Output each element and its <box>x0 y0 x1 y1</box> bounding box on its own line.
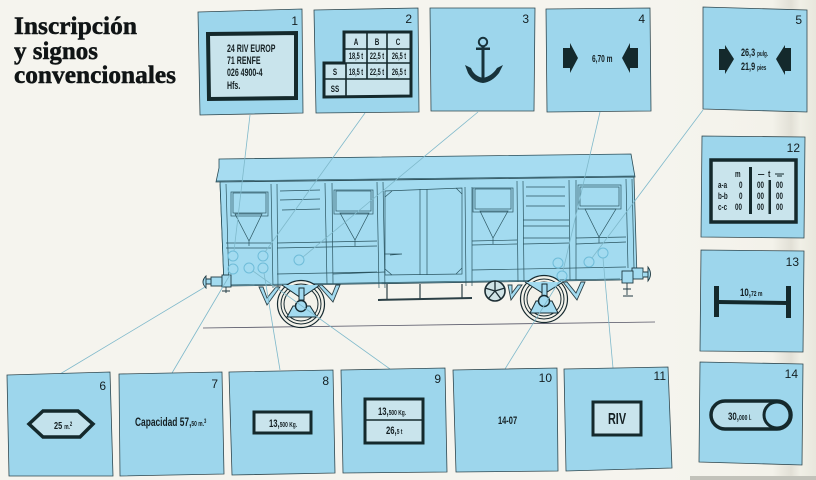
panel 12: load table: 0 <box>739 191 742 201</box>
left buffer <box>203 275 231 293</box>
wagon body <box>220 177 637 286</box>
panel 11: RIV sign: RIV <box>608 410 627 428</box>
panel 12: load table: 0 <box>739 180 742 190</box>
panel 9: weight and tonnage sign: 26,5 t <box>386 425 402 437</box>
panel 2: load table <box>314 8 419 113</box>
panel 4: axle arrows 6,70 m <box>546 8 651 112</box>
panel 12: load table: 00 <box>757 202 764 212</box>
panel 7: capacity <box>119 372 224 476</box>
panel 3: anchor sign: 3 <box>522 12 529 26</box>
panel 12: load table: t <box>768 169 771 179</box>
panel 6: hexagon area sign: 2 <box>70 421 72 428</box>
panel 12: load table: — <box>758 169 764 179</box>
right buffer <box>622 267 650 296</box>
marking location circles <box>228 248 608 281</box>
panel 5: gauge arrows: 21,9 pies <box>741 61 767 72</box>
title: y signos <box>14 38 98 65</box>
panel 12: load table: 00 <box>735 202 742 212</box>
panel 13: wheelbase sign: 13 <box>786 255 799 269</box>
panel 11: RIV sign <box>564 367 672 471</box>
panel 2: load table: B <box>375 37 380 47</box>
brake wheel <box>485 281 505 301</box>
panel 2: load table: C <box>396 37 401 47</box>
wagon roof <box>216 154 635 182</box>
panel 7: capacity: Capacidad 57,50 m. <box>135 417 204 429</box>
panel 14: tank capacity sign: 30,000 l. <box>728 411 752 423</box>
panel 12: load table: 00 <box>776 202 783 212</box>
panel 5: gauge arrows: 26,3 pulg. <box>741 47 768 58</box>
panel 10: revision date: 10 <box>539 371 552 385</box>
panel 2: load table: S <box>333 67 337 77</box>
panel 8: weight sign: 13,500 Kg. <box>269 418 297 430</box>
panel 8: weight sign <box>229 370 335 475</box>
panel 1: wagon inscription: 026 4900-4 <box>227 66 263 78</box>
panel 14: tank capacity sign <box>699 362 803 465</box>
panel 12: load table <box>701 136 805 238</box>
loading hatches with triangles <box>231 185 621 246</box>
right wheel and axle box <box>520 276 568 322</box>
panel 9: weight and tonnage sign: 9 <box>434 372 441 386</box>
panel 10: revision date <box>453 368 558 472</box>
panel 12: load table: a-a <box>718 180 728 190</box>
panel 4: axle arrows 6,70 m: 4 <box>638 12 645 26</box>
panel 14: tank capacity sign: 14 <box>785 367 798 381</box>
panel 12: load table: 00 <box>757 180 764 190</box>
footboard <box>378 284 472 300</box>
panel 9: weight and tonnage sign <box>341 368 447 473</box>
body posts and rails <box>216 176 635 288</box>
panel 7: capacity: 7 <box>211 377 218 391</box>
title <box>14 13 176 89</box>
title: convencionales <box>14 62 176 89</box>
panel 6: hexagon area sign: 6 <box>99 379 106 393</box>
panel 12: load table: 12 <box>787 141 800 155</box>
panel 1: wagon inscription: 1 <box>291 14 298 28</box>
ground line <box>203 322 655 328</box>
panel 7: capacity: 3 <box>204 418 206 425</box>
panel 12: load table: 00 <box>757 191 764 201</box>
panel 5: gauge arrows <box>703 7 807 112</box>
panel 2: load table: SS <box>331 84 339 94</box>
panel 10: revision date: 14-07 <box>498 413 517 426</box>
panel 4: axle arrows 6,70 m: 6,70 m <box>592 53 613 64</box>
panel 12: load table: c-c <box>718 202 728 212</box>
panel 2: load table: 22,5 t <box>370 51 384 61</box>
leader lines <box>60 110 703 374</box>
panel 12: load table: 00 <box>776 191 783 201</box>
panel 12: load table: 00 <box>776 180 783 190</box>
suspension springs <box>259 282 585 305</box>
panel 2: load table: 2 <box>405 12 412 26</box>
panel 2: load table: 18,5 t <box>349 51 363 61</box>
panel 2: load table: A <box>354 37 359 47</box>
panel 13: wheelbase sign <box>700 250 804 352</box>
panel 2: load table: 26,5 t <box>392 67 406 77</box>
panel 2: load table: 26,5 t <box>392 51 406 61</box>
title: Inscripción <box>14 13 137 40</box>
panel 12: load table: b-b <box>718 191 728 201</box>
panel 3: anchor sign <box>430 8 535 111</box>
panel 1: wagon inscription: 24 RIV EUROP <box>227 42 275 54</box>
panel 8: weight sign: 8 <box>322 374 329 388</box>
panel 13: wheelbase sign: 10,72 m <box>740 287 763 299</box>
panel 11: RIV sign: 11 <box>654 369 666 383</box>
panel 9: weight and tonnage sign: 13,500 Kg. <box>378 406 406 418</box>
left wheel and axle box <box>278 280 324 328</box>
panel 1: wagon inscription <box>198 9 303 115</box>
panel 12: load table: m <box>735 169 741 179</box>
panel 1: wagon inscription: Hfs. <box>227 79 240 91</box>
panel 6: hexagon area sign: 25 m. <box>54 420 70 431</box>
panel 6: hexagon area sign <box>7 372 113 476</box>
panel 2: load table: 18,5 t <box>349 67 363 77</box>
door <box>384 188 462 275</box>
panel 5: gauge arrows: 5 <box>795 13 802 27</box>
panel 2: load table: 22,5 t <box>370 67 384 77</box>
railway wagon diagram <box>60 110 703 374</box>
panel 1: wagon inscription: 71 RENFE <box>227 54 261 66</box>
